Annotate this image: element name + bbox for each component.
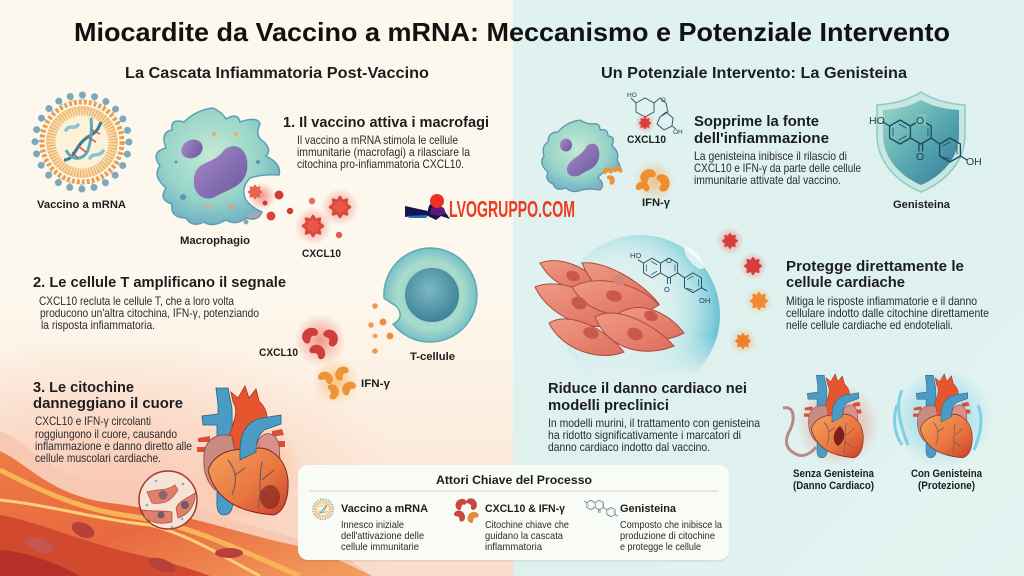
icon: protective bubble with molecule xyxy=(560,235,720,372)
icon: small molecule: OH xyxy=(673,129,683,136)
icon: T cell xyxy=(384,248,477,342)
text block: reduces damage: danno cardiaco indotto dal vaccino. xyxy=(548,440,710,454)
text block: suppress source: Sopprime la fonte xyxy=(694,113,819,130)
text block: step 3: CXCL10 e IFN-γ circolanti xyxy=(35,414,151,428)
icon: free cytokines xyxy=(716,227,773,355)
text block: step 1: 1. Il vaccino attiva i macrofagi xyxy=(283,114,489,131)
icon: protective bubble with molecule: O xyxy=(666,256,672,265)
legend item: genistein: Composto che inibisce la xyxy=(620,519,722,531)
legend item: vaccine: Vaccino a mRNA xyxy=(341,503,428,515)
label: T cell: T-cellule xyxy=(410,351,455,363)
panel heading: Attori Chiave del Processo xyxy=(436,473,592,487)
icon: heart without genistein xyxy=(783,374,880,467)
label: with genistein xyxy=(911,468,983,492)
heading: left column: La Cascata Infiammatoria Post-Vaccino xyxy=(125,65,429,82)
text block: step 2: producono un'altra citochina, IFN-γ, potenziando xyxy=(40,306,259,320)
text block: direct protection: Protegge direttamente le xyxy=(786,258,964,275)
panel: key actors xyxy=(298,465,729,562)
icon: CXCL10 small xyxy=(635,113,655,133)
text block: step 1: citochina pro-infiammatoria CXCL10. xyxy=(297,157,464,171)
label: CXCL10 right: CXCL10 xyxy=(627,134,666,146)
icon: protective bubble with molecule: HO xyxy=(630,251,641,260)
icon: small molecule xyxy=(627,92,683,136)
text block: step 3: cellule muscolari cardiache. xyxy=(35,451,161,465)
text block: step 2: CXCL10 recluta le cellule T, che a loro volta xyxy=(39,294,234,308)
text block: direct protection: cellule cardiache xyxy=(786,274,905,291)
icon: genistein shield: O xyxy=(916,151,924,163)
watermark logo: LVOGRUPPO.COM xyxy=(449,196,575,222)
text block: step 1: Il vaccino a mRNA stimola le cellule xyxy=(297,133,458,147)
icon: genistein shield: OH xyxy=(966,156,982,168)
legend item: cytokines xyxy=(485,503,569,553)
legend item: genistein xyxy=(620,503,722,553)
icon: small molecule: O xyxy=(661,98,666,104)
label: without genistein: (Danno Cardiaco) xyxy=(793,480,874,492)
label: IFN gamma: IFN-γ xyxy=(361,378,391,390)
legend item: vaccine: cellule immunitarie xyxy=(341,541,419,553)
text block: step 1: immunitarie (macrofagi) a rilasciare la xyxy=(297,145,470,159)
icon: small macrophage with genistein xyxy=(542,120,623,192)
text block: direct protection: cellulare indotto dalle citochine direttamente xyxy=(786,306,989,320)
icon: cardiac cells xyxy=(535,261,684,355)
legend item: cytokines: inflammatoria xyxy=(485,541,542,553)
icon: IFN gamma small xyxy=(633,160,675,202)
icon: T cell cytokines xyxy=(368,303,394,354)
icon: CXCL10 beans xyxy=(294,314,346,366)
bloodstream waves xyxy=(0,431,372,576)
text block: step 3: 3. Le citochine xyxy=(33,379,134,396)
text block: reduces damage: Riduce il danno cardiaco nei xyxy=(548,380,747,397)
legend item: genistein: produzione di citochine xyxy=(620,530,715,542)
icon: mRNA vaccine particle xyxy=(35,95,129,189)
icon: CXCL10 particles xyxy=(244,182,359,245)
label: vaccine: Vaccino a mRNA xyxy=(37,199,126,211)
icon: macrophage xyxy=(156,108,279,225)
legend item: cytokines: guidano la cascata xyxy=(485,530,563,542)
label: with genistein: (Protezione) xyxy=(918,480,975,492)
text block: step 3 xyxy=(33,379,192,465)
text block: suppress source xyxy=(694,113,861,187)
text block: reduces damage xyxy=(548,380,760,454)
text block: step 3: danneggiano il cuore xyxy=(33,395,183,412)
text block: reduces damage: ha ridotto significativamente i marcatori di xyxy=(548,428,741,442)
icon: protective bubble with molecule: O xyxy=(664,285,670,294)
icon: genistein shield: HO xyxy=(869,115,885,127)
icon: protective bubble with molecule: OH xyxy=(699,296,710,305)
icon: heart with genistein xyxy=(892,368,992,468)
text block: step 2 xyxy=(33,274,286,332)
legend item: vaccine: Innesco iniziale xyxy=(341,519,404,531)
text block: direct protection xyxy=(786,258,989,332)
icon: small molecule: HO xyxy=(627,92,637,99)
legend item: vaccine: dell'attivazione delle xyxy=(341,530,424,542)
text block: suppress source: immunitarie attivate dal vaccino. xyxy=(694,173,841,187)
text block: reduces damage: In modelli murini, il trattamento con genisteina xyxy=(548,416,760,430)
background left xyxy=(0,0,513,576)
label: genistein: Genisteina xyxy=(893,199,951,211)
text block: reduces damage: modelli preclinici xyxy=(548,397,669,414)
text block: step 1 xyxy=(283,114,489,171)
icon: genistein shield xyxy=(869,92,982,192)
title: Miocardite da Vaccino a mRNA: Meccanismo e Potenziale Intervento xyxy=(74,17,950,47)
legend item: genistein: e protegge le cellule xyxy=(620,541,701,553)
watermark logo xyxy=(405,194,575,222)
text block: suppress source: La genisteina inibisce il rilascio di xyxy=(694,149,847,163)
heading: right column: Un Potenziale Intervento: La Genisteina xyxy=(601,65,907,82)
text block: step 2: 2. Le cellule T amplificano il segnale xyxy=(33,274,286,291)
icon: legend cytokines xyxy=(452,496,480,525)
label: with genistein: Con Genisteina xyxy=(911,468,983,480)
icon: genistein shield: O xyxy=(916,115,924,127)
label: CXCL10 second: CXCL10 xyxy=(259,347,298,359)
text block: direct protection: nelle cellule cardiache ed endoteliali. xyxy=(786,318,953,332)
text block: suppress source: dell'infiammazione xyxy=(694,130,829,147)
label: without genistein: Senza Genisteina xyxy=(793,468,875,480)
label: IFN gamma right: IFN-γ xyxy=(642,197,671,209)
icon: damaged tissue magnifier xyxy=(139,471,197,529)
label: without genistein xyxy=(793,468,875,492)
icon: IFN gamma beans xyxy=(312,358,360,406)
background right xyxy=(513,0,1024,576)
legend item: vaccine xyxy=(341,503,428,553)
icon: legend molecule xyxy=(584,500,618,517)
legend item: cytokines: Citochine chiave che xyxy=(485,519,569,531)
label: macrophage: Macrophagio xyxy=(180,235,250,247)
label: CXCL10: CXCL10 xyxy=(302,248,341,260)
legend item: genistein: Genisteina xyxy=(620,503,677,515)
text block: step 3: roggiungono il cuore, causando xyxy=(35,427,177,441)
text block: suppress source: CXCL10 e IFN-γ da parte delle cellule xyxy=(694,161,861,175)
icon: legend vaccine xyxy=(313,499,333,520)
text block: step 2: la risposta infiammatoria. xyxy=(41,318,155,332)
text block: step 3: inflammazione e danno diretto alle xyxy=(35,439,192,453)
icon: inflamed heart xyxy=(197,386,302,522)
text block: direct protection: Mitiga le risposte infiammatorie e il danno xyxy=(786,294,977,308)
pink blush xyxy=(0,330,410,576)
legend item: cytokines: CXCL10 & IFN-γ xyxy=(485,503,566,515)
